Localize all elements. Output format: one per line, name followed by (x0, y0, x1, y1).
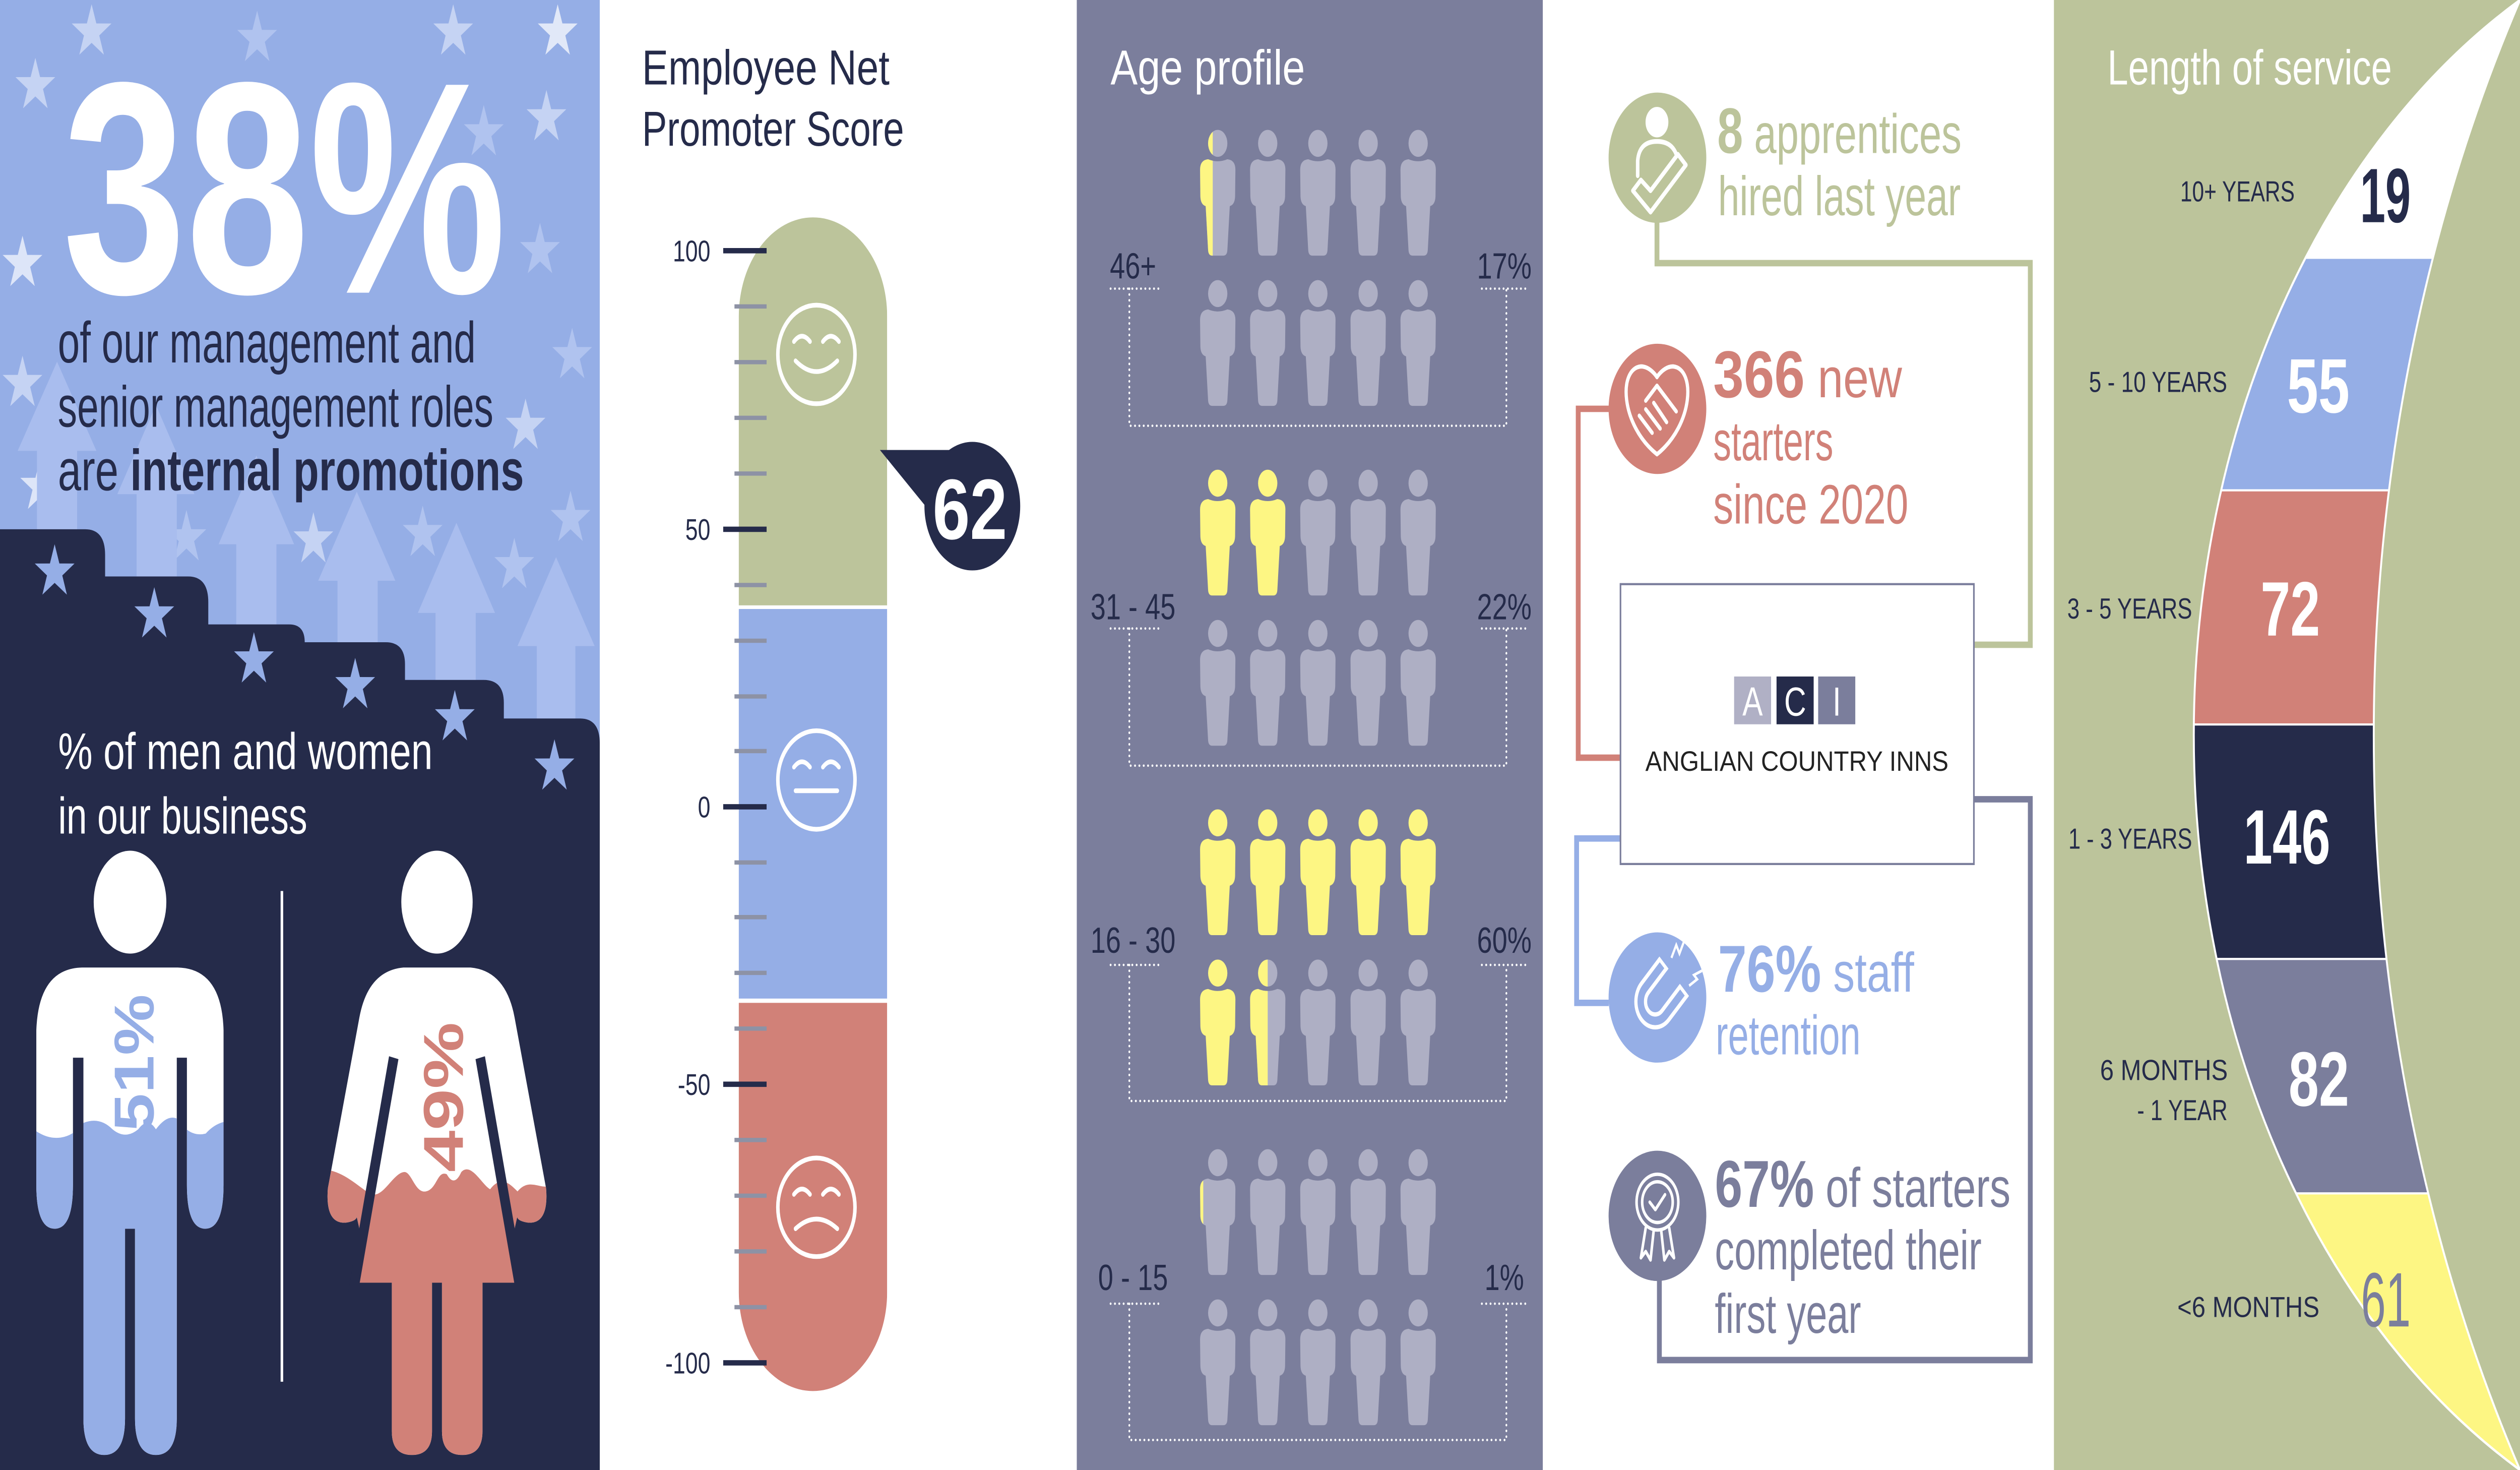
people group: 31-45 (1200, 470, 1436, 746)
promotions description: of our management and (58, 311, 476, 375)
band values: 72 (2260, 566, 2320, 652)
people group: 0-15 (1200, 1149, 1436, 1425)
heading: men and women (58, 723, 432, 845)
people group: 46+ (1200, 130, 1436, 406)
band labels (2067, 175, 2319, 1323)
band labels: - 1 YEAR (2137, 1094, 2228, 1126)
band labels: 5 - 10 YEARS (2089, 365, 2227, 398)
heading: men and women: % of men and women (58, 723, 432, 780)
stat: apprentices (1609, 93, 1962, 227)
panel: internal promotions (0, 0, 600, 1470)
background arrows (18, 362, 595, 857)
stat: first year completion: first year (1715, 1282, 1861, 1345)
stat: staff retention: 76% staff (1718, 932, 1915, 1006)
panel: recruitment stats (1543, 0, 2054, 1470)
band labels: 10+ YEARS (2180, 175, 2295, 208)
navy stepped area (0, 529, 600, 1470)
band values: 55 (2287, 343, 2350, 429)
title: Employee Net (642, 40, 890, 95)
stat: apprentices: hired last year (1718, 165, 1961, 227)
band values: 61 (2361, 1257, 2411, 1343)
age labels: 46+ (1110, 246, 1156, 286)
age labels: 22% (1477, 586, 1532, 627)
band labels: 6 MONTHS (2100, 1054, 2228, 1086)
divider (281, 891, 283, 1382)
age labels: 1% (1485, 1257, 1524, 1298)
major ticks and labels (665, 234, 767, 1380)
age labels (1091, 246, 1532, 1298)
band values (2244, 153, 2411, 1343)
major ticks and labels: -50 (678, 1068, 710, 1102)
major ticks and labels: 0 (698, 790, 710, 824)
people group: 16-30 (1200, 810, 1436, 1085)
callout: score 62 (880, 442, 1020, 571)
stars on steps (35, 544, 575, 789)
panel: employee net promoter score (600, 0, 1077, 1470)
promotions description: are internal promotions (58, 439, 524, 503)
band values: 19 (2360, 153, 2411, 239)
icon: neutral face (778, 730, 855, 829)
connector lines (1577, 214, 2030, 1360)
stat: first year completion: completed their (1715, 1219, 1982, 1281)
stat: first year completion: 67% of starters (1715, 1147, 2010, 1221)
age labels: 16 - 30 (1091, 920, 1175, 961)
callout: score 62: 62 (932, 461, 1007, 557)
stat: apprentices: 8 apprentices (1717, 95, 1962, 167)
background stars (3, 5, 592, 588)
band values: 146 (2244, 794, 2330, 880)
major ticks and labels: 100 (673, 234, 710, 268)
stat: new starters: since 2020 (1713, 473, 1908, 535)
title: Length of service (2107, 40, 2392, 95)
logo box: ANGLIAN COUNTRY INNS (1646, 746, 1948, 777)
band labels: 3 - 5 YEARS (2067, 592, 2192, 625)
major ticks and labels: -100 (665, 1347, 710, 1380)
icon: man 51%: 51% (103, 994, 165, 1131)
band labels: <6 MONTHS (2177, 1291, 2319, 1323)
age labels: 31 - 45 (1091, 586, 1175, 627)
minor ticks (734, 307, 767, 1307)
big number 38%: 38% (62, 20, 506, 357)
band values: 82 (2289, 1036, 2349, 1122)
logo box: C (1784, 679, 1806, 725)
icon: woman 49% (328, 851, 546, 1455)
stat: new starters (1609, 337, 1908, 535)
crescent bands (2186, 0, 2520, 1470)
stat: new starters: 366 new (1713, 337, 1902, 411)
icon: happy face (778, 305, 855, 404)
band labels: 1 - 3 YEARS (2068, 822, 2192, 855)
panel: length of service (2054, 0, 2520, 1470)
title: Age profile (1110, 40, 1305, 95)
age labels: 17% (1477, 246, 1532, 286)
title: Promoter Score (642, 102, 904, 157)
panel: age profile (1077, 0, 1543, 1470)
icon: man 51% (36, 851, 224, 1455)
stat: first year completion (1609, 1147, 2010, 1345)
promotions description: senior management roles (58, 375, 493, 439)
thermometer bar (738, 214, 889, 1393)
stat: new starters: starters (1713, 410, 1833, 472)
age labels: 60% (1477, 920, 1532, 961)
icon: woman 49%: 49% (412, 1022, 475, 1172)
stat: staff retention (1609, 932, 1915, 1066)
major ticks and labels: 50 (685, 513, 710, 547)
promotions description (58, 311, 524, 503)
icon: sad face (778, 1158, 855, 1257)
heading: men and women: in our business (58, 787, 307, 845)
stat: staff retention: retention (1716, 1004, 1861, 1066)
title (642, 40, 904, 157)
age labels: 0 - 15 (1098, 1257, 1168, 1298)
logo box: I (1833, 679, 1841, 725)
logo box: A (1742, 679, 1763, 725)
dotted brackets (1110, 289, 1529, 1440)
logo box (1620, 584, 1974, 864)
